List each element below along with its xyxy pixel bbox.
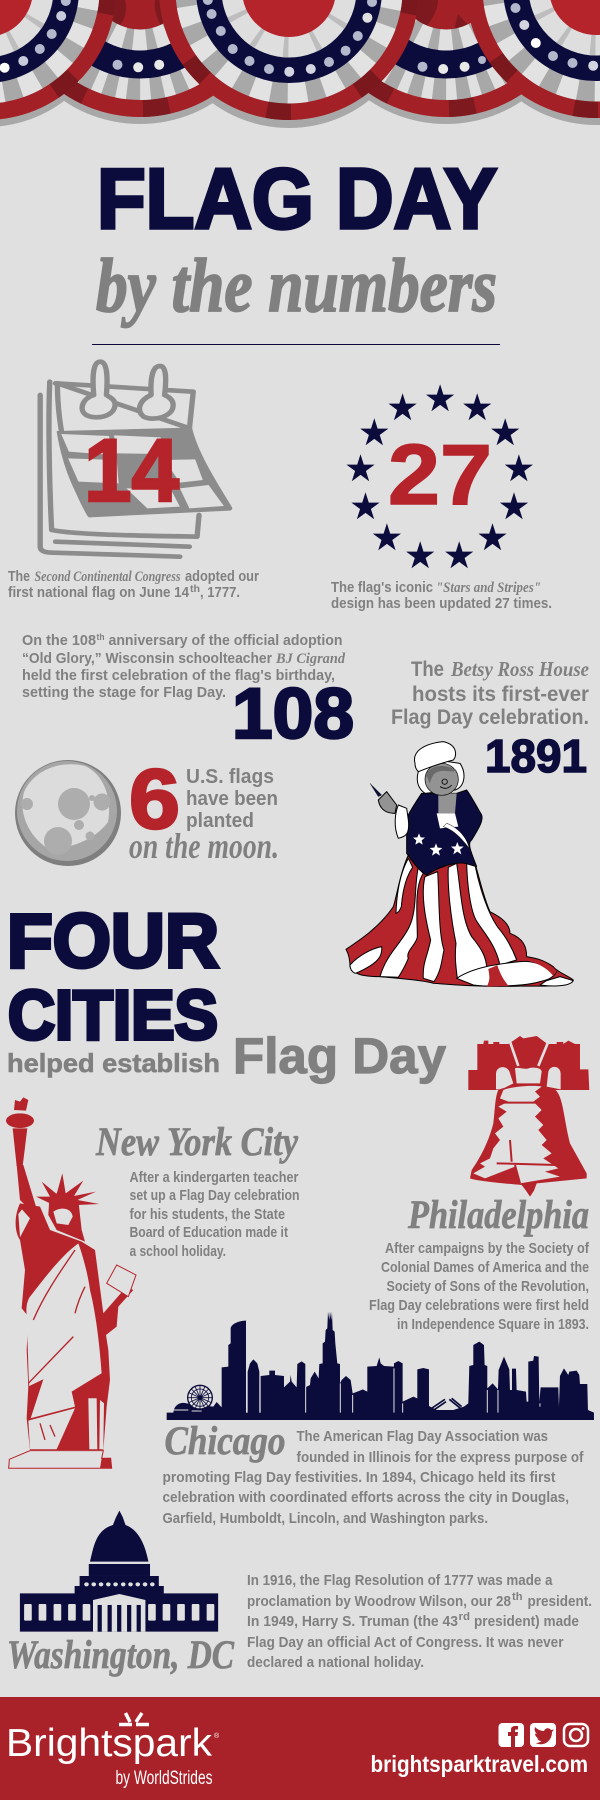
text: Washington paragraph xyxy=(247,1572,592,1671)
text: twenty-seven caption xyxy=(331,579,552,612)
text: fourteen caption: first national flag on June 14 xyxy=(8,584,190,601)
text: Washington, DC: Washington, DC xyxy=(7,1632,235,1677)
text: New York City: New York City xyxy=(95,1119,298,1164)
text: Chicago: promoting Flag Day festivities. In 1894, Chicago held its first xyxy=(162,1469,556,1486)
title: FLAG DAY xyxy=(97,152,497,247)
text: 108th anniversary: setting the stage for Flag Day. xyxy=(22,684,226,701)
heading: four cities: CITIES xyxy=(8,976,218,1054)
text: Chicago: Garfield, Humboldt, Lincoln, and Washington parks. xyxy=(162,1510,488,1527)
text: twenty-seven caption: "Stars and Stripes" xyxy=(436,580,541,596)
bunting banner xyxy=(0,0,600,128)
number 27: 27 xyxy=(388,428,492,523)
text: 108th anniversary xyxy=(22,632,345,701)
text: New York City: After a kindergarten teacher xyxy=(130,1169,299,1186)
text: Washington paragraph: president. xyxy=(528,1593,592,1610)
text: Chicago: The American Flag Day Association was xyxy=(296,1428,548,1445)
text: fourteen caption: , 1777. xyxy=(200,584,240,601)
logo: Brightspark: ® xyxy=(214,1732,220,1740)
text: Betsy Ross House xyxy=(391,657,589,729)
logo: Brightspark xyxy=(6,1713,220,1789)
text: New York City: Board of Education made it xyxy=(130,1224,288,1241)
text: 108th anniversary: On the 108 xyxy=(22,632,96,649)
text: Washington paragraph: president) made xyxy=(474,1613,579,1630)
text: Philadelphia xyxy=(369,1192,590,1333)
text: flags on the moon: on the moon. xyxy=(129,826,279,866)
illustration: Chicago skyline xyxy=(167,1312,594,1420)
footer band xyxy=(0,1697,600,1800)
heading: four cities: FOUR xyxy=(7,899,219,984)
heading: four cities: Flag Day xyxy=(233,1028,446,1084)
number 1891: 1891 xyxy=(485,730,587,782)
text: flags on the moon: have been xyxy=(186,788,278,810)
icon: Liberty Bell xyxy=(468,1036,589,1197)
icon: moon xyxy=(15,760,121,866)
number 6: 6 xyxy=(129,752,180,846)
text: 108th anniversary: “Old Glory,” Wisconsin schoolteacher xyxy=(22,650,272,667)
text: fourteen caption xyxy=(8,568,259,601)
logo: Brightspark: by WorldStrides xyxy=(116,1768,212,1789)
text: Washington paragraph: Flag Day an official Act of Congress. It was never xyxy=(247,1634,564,1651)
text: New York City: for his students, the State xyxy=(130,1206,285,1223)
text: twenty-seven caption: design has been updated 27 times. xyxy=(331,595,552,612)
text: fourteen caption: The xyxy=(8,568,30,585)
text: 108th anniversary: held the first celebration of the flag's birthday, xyxy=(22,667,335,684)
text: Betsy Ross House: Flag Day celebration. xyxy=(391,706,589,729)
text: Washington paragraph: proclamation by Woodrow Wilson, our 28 xyxy=(247,1593,511,1610)
text: 108th anniversary: th xyxy=(96,632,104,642)
icon: U.S. Capitol xyxy=(20,1511,218,1632)
text: 108th anniversary: BJ Cigrand xyxy=(275,651,345,667)
text: New York City: set up a Flag Day celebration xyxy=(130,1187,300,1204)
text: Chicago xyxy=(162,1418,584,1527)
text: Washington paragraph: th xyxy=(512,1591,523,1603)
text: New York City: a school holiday. xyxy=(130,1243,226,1260)
text: Washington paragraph: rd xyxy=(458,1611,470,1623)
social icons xyxy=(498,1723,588,1747)
illustration: Betsy Ross xyxy=(346,742,573,987)
text: fourteen caption: th xyxy=(190,584,200,595)
text: Chicago: celebration with coordinated efforts across the city in Douglas, xyxy=(162,1489,569,1506)
icon: calendar xyxy=(40,362,230,557)
number 108: 108 xyxy=(232,675,354,754)
logo: Brightspark: Brightspark xyxy=(6,1722,213,1765)
text: Washington paragraph: declared a national holiday. xyxy=(247,1654,424,1671)
text: Chicago: Chicago xyxy=(164,1418,286,1463)
text: twenty-seven caption: The flag's iconic xyxy=(331,579,433,596)
heading: four cities: helped establish xyxy=(7,1048,220,1078)
text: Betsy Ross House: The xyxy=(411,658,444,681)
text: 108th anniversary: anniversary of the official adoption xyxy=(108,632,342,649)
heading: four cities xyxy=(7,899,446,1084)
text: flags on the moon: U.S. flags xyxy=(186,766,274,788)
illustration: Statue of Liberty xyxy=(6,1097,136,1468)
text: fourteen caption: Second Continental Congress xyxy=(34,569,181,585)
text: Washington paragraph: In 1949, Harry S. Truman (the 43 xyxy=(247,1613,458,1630)
icon: ring of thirteen stars xyxy=(346,384,533,568)
text: Betsy Ross House: hosts its first-ever xyxy=(412,683,589,706)
number 14: 14 xyxy=(84,420,179,520)
text: flags on the moon xyxy=(129,766,279,866)
text: flags on the moon: planted xyxy=(186,810,254,832)
subtitle: by the numbers xyxy=(96,244,497,328)
text: Washington paragraph: In 1916, the Flag Resolution of 1777 was made a xyxy=(247,1572,553,1589)
text: New York City xyxy=(95,1119,299,1260)
text: fourteen caption: adopted our xyxy=(185,568,259,585)
